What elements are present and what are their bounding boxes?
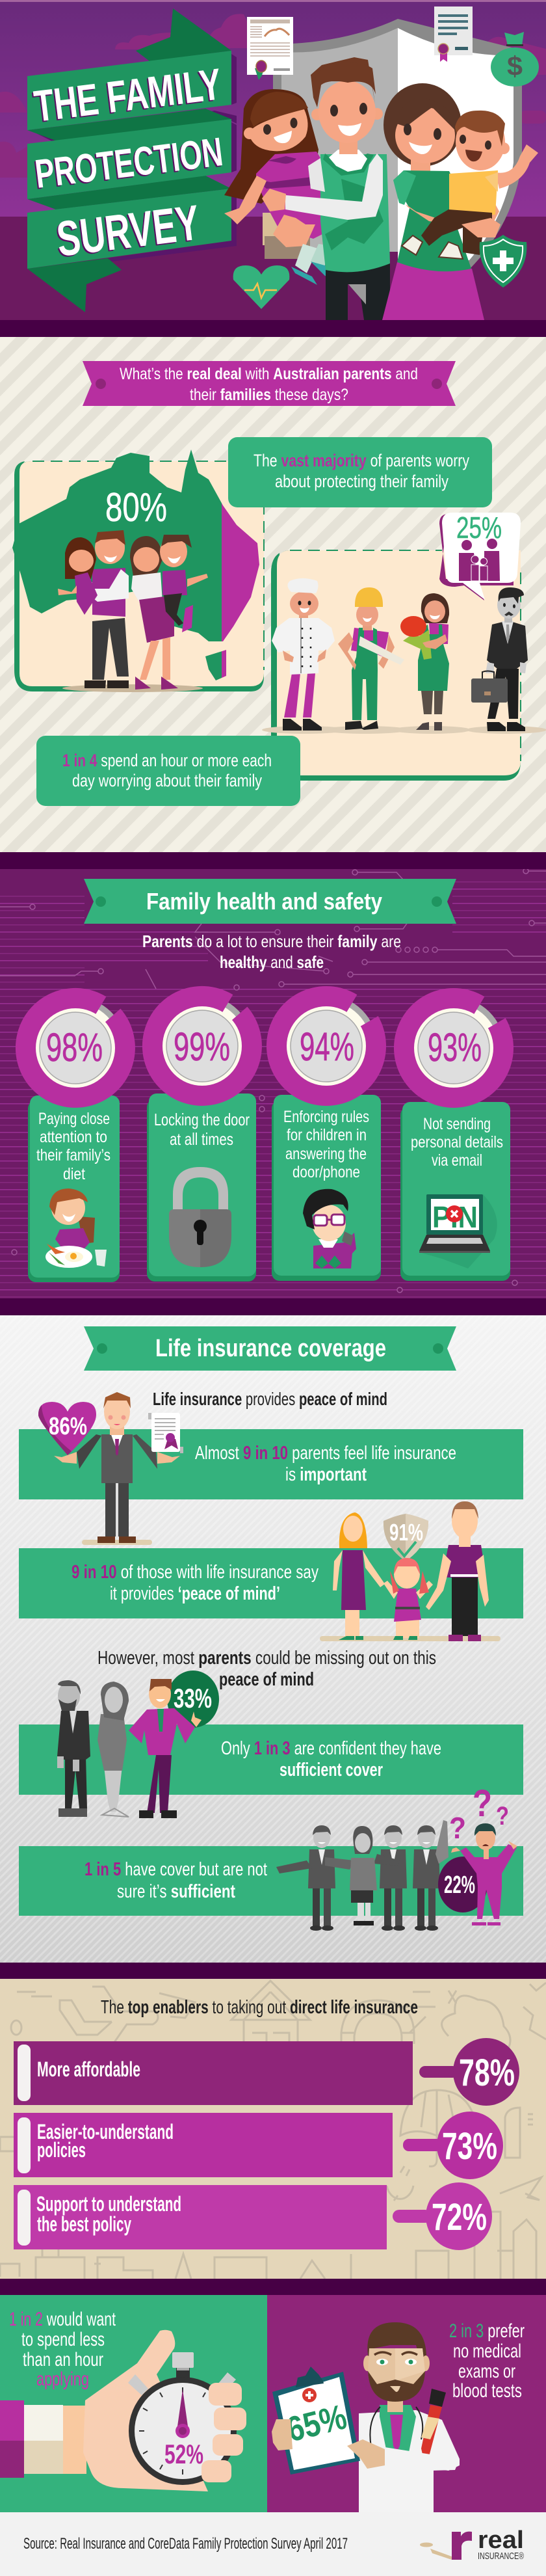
callout: vast majority: The vast majority of parents worry: [254, 451, 469, 470]
card: enforcing rules: door/phone: [292, 1163, 360, 1181]
heading ribbon: life insurance coverage: [84, 1326, 456, 1371]
text: missing out: However, most parents could be missing out on this: [98, 1648, 436, 1669]
card: enforcing rules: for children in: [287, 1126, 367, 1144]
card: enforcing rules: [272, 1095, 381, 1281]
icon: money bag: $: [507, 51, 523, 81]
illustration: group of people with 22%: ?: [496, 1802, 509, 1831]
stat: 80%: 80%: [105, 485, 167, 530]
source note: Source: Real Insurance and CoreData Family Protection Survey April 2017: [23, 2535, 348, 2553]
icon: laptop PIN warning: [419, 1194, 497, 1268]
icon: 22% circle: [438, 1857, 488, 1912]
panel: Australia map and family: [12, 449, 264, 691]
icon: policy document left: [247, 17, 293, 80]
logo: real insurance: real: [478, 2527, 524, 2554]
title: PROTECTION: [31, 131, 224, 198]
icon: policy scroll: [148, 1413, 183, 1453]
text: 2 in 3: [449, 2320, 525, 2402]
bar: support 72%: the best policy: [37, 2212, 131, 2236]
panel: family health and safety background: [0, 852, 546, 1315]
card: diet: Paying close: [38, 1110, 110, 1128]
stat: 94% donut: [266, 986, 386, 1106]
panel: workers: [262, 550, 546, 781]
stat: 93% donut: [394, 988, 514, 1108]
title: [31, 59, 226, 269]
text: 2 in 3: no medical: [453, 2341, 521, 2362]
bar: more affordable 78%: More affordable: [37, 2058, 140, 2081]
icon: blood test tube: [421, 2389, 446, 2469]
card: personal details: via email: [432, 1151, 482, 1170]
heading ribbon: family health and safety: [84, 879, 456, 924]
icon: child eating: [46, 1188, 107, 1268]
icon: shield with cross: [480, 235, 526, 288]
text: 2 in 3: blood tests: [452, 2380, 522, 2402]
bar: easier to understand 73%: Easier-to-understand: [37, 2120, 174, 2143]
text: 1 in 2: 1 in 2 would want: [9, 2309, 116, 2330]
text: 2 in 3: exams or: [458, 2361, 515, 2382]
icon: padlock: [169, 1167, 231, 1267]
card: personal details: personal details: [411, 1133, 503, 1151]
illustration: grey businessman: [471, 587, 528, 731]
bar: more affordable 78%: [14, 2038, 519, 2106]
card: locking the door: Locking the door: [154, 1110, 250, 1129]
panel: section two background: [0, 337, 546, 852]
title ribbon: [27, 8, 237, 312]
text: missing out: [98, 1648, 436, 1690]
card: locking the door: [147, 1093, 256, 1281]
icon: laptop PIN warning: PIN: [432, 1200, 478, 1234]
icon: stopwatch: 52%: [164, 2439, 203, 2469]
panel: bottom split background: [0, 2279, 546, 2576]
icon: heart 86%: [38, 1402, 96, 1455]
text: 1 in 2: to spend less: [21, 2329, 105, 2350]
panel: life insurance background: [0, 1315, 546, 1963]
bar: easier to understand 73%: 73%: [442, 2125, 497, 2167]
card: diet: attention to: [40, 1128, 107, 1146]
illustration: group of people with 22%: ?: [473, 1782, 492, 1825]
text: 1 in 2: applying: [36, 2368, 89, 2390]
logo: real insurance: INSURANCE®: [478, 2551, 524, 2562]
heading ribbon: real deal: What’s the real deal with Australian parents and: [120, 365, 418, 383]
green bar: 1 in 5 not sure: 1 in 5 have cover but are not: [84, 1859, 267, 1880]
icon: money bag: [491, 32, 539, 87]
card: locking the door: at all times: [170, 1129, 233, 1149]
text: parents do a lot: Parents do a lot to ensure their family are: [142, 932, 401, 951]
speech bubble: 25%: [439, 511, 521, 600]
illustration: florist: [400, 593, 449, 731]
bar: support 72%: [14, 2182, 492, 2250]
green bar: 9 in 10 important: is important: [285, 1464, 367, 1485]
stat: 94% donut: 94%: [300, 1025, 354, 1069]
illustration: family with 91% shield: [320, 1501, 500, 1641]
icon: stopwatch: [128, 2352, 237, 2485]
green bar: 1 in 3 confident: [19, 1724, 523, 1795]
icon: 33% circle: [167, 1670, 219, 1728]
text: parents do a lot: healthy and safe: [220, 952, 324, 972]
text: peace of mind intro: Life insurance provides peace of mind: [153, 1389, 387, 1409]
illustration: group of people with 22%: [276, 1782, 517, 1931]
icon: clipboard 65%: 65%: [283, 2397, 350, 2450]
panel: top enablers background: [0, 1963, 546, 2279]
text: 1 in 2: than an hour: [23, 2349, 103, 2370]
illustration: father: [262, 57, 390, 320]
illustration: hand holding stopwatch: [0, 2330, 246, 2491]
stat: 93% donut: 93%: [428, 1025, 482, 1069]
shield behind the family: [263, 19, 522, 269]
illustration: chef: [272, 578, 335, 731]
card: diet: diet: [63, 1165, 85, 1183]
illustration: doctor with clipboard: [272, 2322, 460, 2512]
heading ribbon: real deal: their families these days?: [190, 386, 348, 404]
text: top enablers: The top enablers to taking out direct life insurance: [101, 1997, 418, 2018]
illustration: mother and boy: [382, 83, 538, 320]
icon: heart 86%: 86%: [49, 1413, 87, 1440]
icon: 91% shield: 91%: [389, 1519, 423, 1546]
heading ribbon: real deal: [83, 361, 456, 406]
icon: policy document right: [434, 7, 473, 62]
icon: 22% circle: 22%: [444, 1872, 475, 1899]
green bar: 1 in 3 confident: Only 1 in 3 are confident they have: [221, 1738, 441, 1759]
speech bubble: 25%: 25%: [456, 511, 502, 544]
illustration: three adults with 33%: [57, 1670, 219, 1818]
callout: 1 in 4: [36, 736, 300, 806]
text: missing out: peace of mind: [219, 1669, 314, 1690]
stat: 98% donut: [16, 988, 135, 1108]
text: parents do a lot: [142, 932, 401, 972]
card: personal details: Not sending: [423, 1115, 491, 1133]
title: THE FAMILY: [31, 60, 223, 133]
illustration: man with heart and policy: [54, 1392, 180, 1545]
icon: clipboard 65%: [272, 2367, 360, 2475]
bar: support 72%: 72%: [432, 2196, 487, 2238]
text: 2 in 3: 2 in 3 prefer: [449, 2320, 525, 2342]
green bar: 9 in 10 important: [19, 1429, 523, 1499]
illustration: purple family: [58, 530, 208, 692]
title: SURVEY: [53, 196, 201, 269]
stat: 99% donut: [142, 986, 262, 1106]
illustration: group of people with 22%: ?: [449, 1811, 466, 1845]
title: PROTECTION: [32, 129, 226, 197]
stat: 99% donut: 99%: [174, 1025, 230, 1069]
text: 1 in 2: [9, 2309, 116, 2390]
hero background: [0, 0, 546, 337]
bar: easier to understand 73%: [14, 2112, 503, 2179]
green bar: 1 in 3 confident: sufficient cover: [280, 1760, 383, 1780]
green bar: 1 in 5 not sure: sure it’s sufficient: [117, 1881, 235, 1902]
callout: 1 in 4: 1 in 4 spend an hour or more each: [62, 751, 272, 770]
callout: 1 in 4: day worrying about their family: [72, 771, 262, 790]
heading ribbon: life insurance coverage: Life insurance coverage: [155, 1335, 386, 1362]
title: THE FAMILY: [32, 59, 224, 131]
illustration: girl being carried: [224, 89, 348, 285]
card: personal details: [400, 1102, 510, 1281]
icon: heart: [233, 265, 289, 309]
card: enforcing rules: answering the: [285, 1145, 367, 1163]
card: diet: [28, 1095, 120, 1282]
icon: 33% circle: 33%: [174, 1683, 212, 1713]
bar: support 72%: Support to understand: [36, 2192, 181, 2216]
callout: vast majority: [228, 437, 492, 507]
icon: 91% shield: [384, 1514, 428, 1561]
green bar: 9 in 10 important: Almost 9 in 10 parents feel life insurance: [195, 1443, 456, 1464]
bar: easier to understand 73%: policies: [37, 2138, 86, 2162]
green bar: 9 in 10 peace of mind: 9 in 10 of those with life insurance say: [72, 1562, 318, 1583]
green bar: 9 in 10 peace of mind: [19, 1548, 523, 1618]
bar: more affordable 78%: 78%: [459, 2052, 515, 2094]
green bar: 1 in 5 not sure: [19, 1846, 523, 1916]
stat: 98% donut: 98%: [46, 1025, 103, 1069]
card: diet: their family’s: [36, 1146, 110, 1164]
title: SURVEY: [54, 195, 202, 267]
green bar: 9 in 10 peace of mind: it provides ‘peace of mind’: [110, 1583, 280, 1604]
icon: child with phone: [303, 1189, 356, 1268]
heading ribbon: family health and safety: Family health and safety: [146, 888, 382, 915]
card: enforcing rules: Enforcing rules: [283, 1108, 369, 1126]
illustration: tradesperson: [338, 587, 404, 730]
logo: real insurance: [420, 2527, 524, 2562]
callout: vast majority: about protecting their family: [275, 472, 448, 491]
